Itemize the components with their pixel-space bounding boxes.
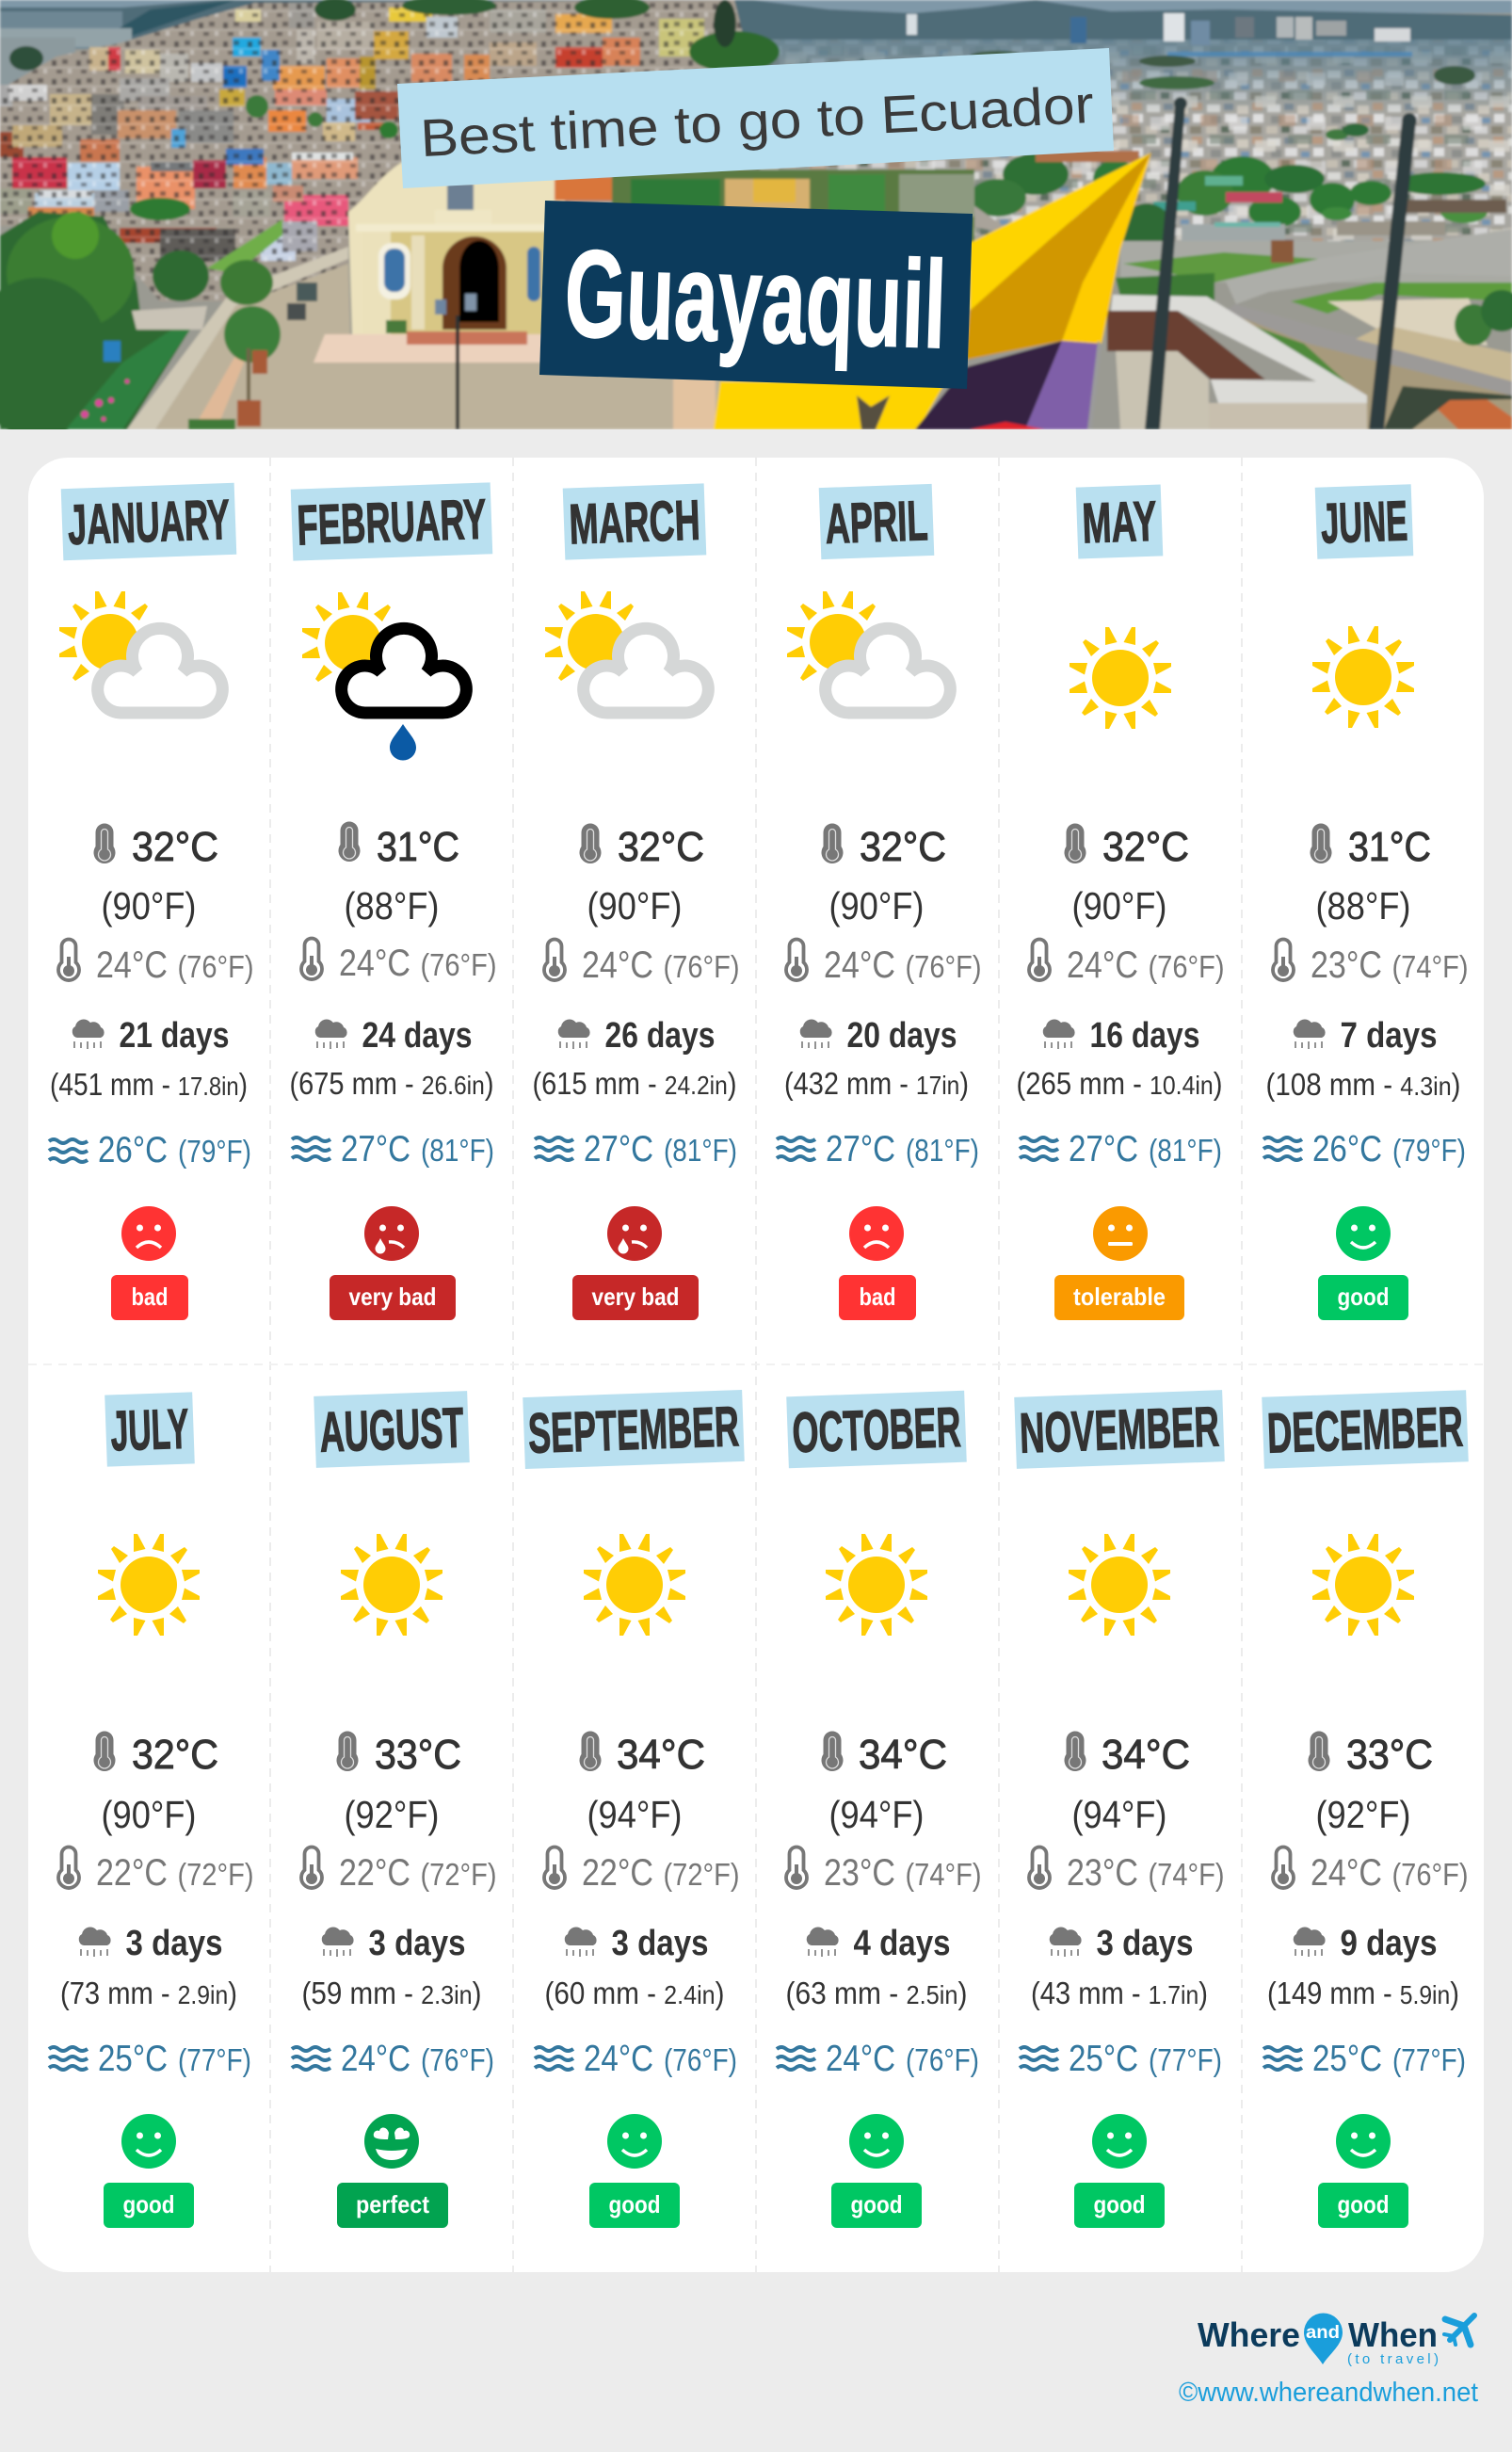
- low temperature: [786, 1847, 981, 1894]
- rainfall: (73 mm - 2.9in): [60, 1976, 237, 2010]
- rating pill: good: [1318, 1275, 1408, 1320]
- month label: AUGUST: [318, 1395, 465, 1464]
- rainy days: 20 days: [847, 1016, 957, 1056]
- rainfall: (60 mm - 2.4in): [545, 1976, 725, 2010]
- rating face: good: [121, 2114, 176, 2169]
- terrace wall and plaza: [127, 247, 734, 429]
- sea temperature: [535, 2039, 737, 2079]
- rating face: good: [1092, 2114, 1147, 2169]
- month label: SEPTEMBER: [527, 1395, 740, 1465]
- sea temperature: 26°C: [1312, 1129, 1382, 1170]
- sea temperature: [1020, 2039, 1222, 2079]
- high temperature: 34°C: [1102, 1732, 1190, 1778]
- sea temperature: (77°F): [1149, 2042, 1222, 2077]
- low temperature: [786, 940, 981, 986]
- low temperature: (76°F): [663, 949, 740, 984]
- trees and garden left: [0, 212, 207, 438]
- weather icon: sun: [341, 1534, 442, 1636]
- low temperature: 23°C: [824, 1852, 895, 1894]
- rating face: good: [1336, 2114, 1391, 2169]
- rating pill: perfect: [337, 2183, 448, 2228]
- month: May: [1017, 484, 1224, 1320]
- rainy days: 3 days: [369, 1924, 465, 1963]
- rainfall: (63 mm - 2.5in): [785, 1976, 968, 2010]
- rating pill: perfect: perfect: [356, 2190, 429, 2218]
- rainy days: [1043, 1016, 1199, 1056]
- low temperature: [1029, 940, 1224, 986]
- green behind title: [555, 169, 974, 429]
- low temperature: 22°C: [339, 1852, 410, 1894]
- month label: [314, 1391, 470, 1468]
- low temperature: 24°C: [1311, 1852, 1382, 1894]
- sea temperature: 26°C: [98, 1130, 168, 1170]
- rating pill: bad: [111, 1275, 188, 1320]
- low temperature: (74°F): [1391, 949, 1469, 984]
- rainy days: 3 days: [126, 1924, 222, 1963]
- month: March: [533, 483, 740, 1320]
- high temperature: [339, 821, 459, 870]
- sea temperature: 27°C: [1069, 1129, 1138, 1170]
- L-shaped building: [1107, 295, 1367, 429]
- month: July: [49, 1392, 254, 2228]
- title banner: Best time to go to Ecuador: Best time to go to Ecuador: [419, 74, 1095, 168]
- rainy days: [1294, 1924, 1437, 1963]
- sea temperature: 25°C: [98, 2039, 168, 2079]
- icon: map pin with and: and: [1306, 2323, 1340, 2343]
- weather icon: sun: [1070, 627, 1171, 729]
- sea temperature: 25°C: [1069, 2039, 1138, 2079]
- weather icon: sun and grey cloud: [59, 591, 222, 713]
- rating pill: good: good: [1337, 1282, 1390, 1311]
- sea temperature: [292, 2039, 494, 2079]
- high temperature: [821, 1731, 947, 1778]
- weather icon: sun, black cloud and rain drop: [302, 592, 466, 761]
- sea temperature: [292, 1129, 494, 1170]
- rating pill: bad: bad: [859, 1282, 896, 1311]
- sea temperature: 27°C: [341, 1129, 410, 1170]
- high temperature in Fahrenheit: (90°F): [828, 884, 925, 928]
- sea temperature: [49, 2039, 251, 2079]
- low temperature: (72°F): [663, 1857, 740, 1892]
- high temperature: 32°C: [132, 1732, 218, 1778]
- high temperature: 32°C: [132, 824, 218, 870]
- high temperature: 32°C: [618, 824, 704, 870]
- weather icon: sun and grey cloud: [545, 591, 708, 713]
- rainy days: [1294, 1016, 1437, 1056]
- low temperature: (74°F): [1149, 1857, 1224, 1892]
- rating pill: very bad: very bad: [348, 1282, 437, 1311]
- rating face: bad: [849, 1206, 904, 1261]
- month label: [291, 482, 492, 561]
- rainy days: [315, 1016, 473, 1056]
- month label: [61, 483, 236, 560]
- weather icon: sun: [826, 1534, 927, 1636]
- high temperature in Fahrenheit: (94°F): [1071, 1793, 1167, 1836]
- low temperature: (76°F): [1149, 949, 1224, 984]
- rainfall: (451 mm - 17.8in): [50, 1067, 248, 1102]
- month: August: [292, 1391, 497, 2228]
- sea temperature: [777, 1129, 979, 1170]
- rating pill: good: good: [608, 2190, 661, 2218]
- weather icon: sun: [1069, 1534, 1170, 1636]
- sea temperature: (77°F): [1392, 2042, 1466, 2077]
- low temperature: [544, 940, 740, 986]
- high temperature: [337, 1731, 461, 1778]
- low temperature: 24°C: [824, 944, 895, 986]
- high temperature: 32°C: [860, 824, 946, 870]
- month: December: [1262, 1390, 1469, 2228]
- month: November: [1014, 1390, 1225, 2228]
- high temperature: 33°C: [375, 1732, 461, 1778]
- month label: [1014, 1390, 1225, 1469]
- high temperature: [1064, 823, 1189, 870]
- month: October: [777, 1391, 981, 2228]
- low temperature: 24°C: [1067, 944, 1138, 986]
- month label: JULY: [109, 1397, 190, 1462]
- rainy days: 3 days: [612, 1924, 708, 1963]
- month label: [786, 1391, 967, 1468]
- high temperature: 34°C: [859, 1732, 947, 1778]
- high temperature: [1309, 1731, 1433, 1778]
- rating face: good: [849, 2114, 904, 2169]
- icon: map pin with and: [1304, 2313, 1343, 2364]
- rainy days: 21 days: [119, 1016, 230, 1056]
- rainfall: (432 mm - 17in): [784, 1066, 969, 1101]
- rainy days: [72, 1016, 230, 1056]
- rating pill: very bad: [572, 1275, 699, 1320]
- footer logo: Where and When to travel: [1198, 2313, 1474, 2367]
- high temperature in Fahrenheit: (90°F): [102, 884, 196, 928]
- high temperature: [821, 823, 946, 870]
- roads and fields right: [1116, 229, 1512, 429]
- rating face: perfect: [364, 2114, 419, 2169]
- weather icon: sun and grey cloud: [787, 591, 950, 713]
- low temperature: 24°C: [96, 944, 168, 986]
- rating pill: good: good: [122, 2190, 175, 2218]
- rating pill: very bad: very bad: [591, 1282, 680, 1311]
- sea temperature: (81°F): [906, 1133, 979, 1168]
- month label: [563, 483, 706, 560]
- high temperature: [580, 823, 704, 870]
- rating pill: good: [1318, 2183, 1408, 2228]
- rainy days: [807, 1924, 951, 1963]
- rainfall: (43 mm - 1.7in): [1031, 1976, 1208, 2010]
- sea temperature: 27°C: [826, 1129, 895, 1170]
- low temperature: [58, 940, 254, 986]
- rating pill: good: good: [1337, 2190, 1390, 2218]
- sea temperature: 25°C: [1312, 2039, 1382, 2079]
- weather icon: sun: [98, 1534, 200, 1636]
- church: [314, 162, 568, 429]
- rating pill: good: good: [851, 2190, 902, 2218]
- rating pill: good: [1074, 2183, 1165, 2228]
- rainy days: [79, 1924, 222, 1963]
- rating pill: tolerable: tolerable: [1073, 1282, 1166, 1311]
- hero photo: Guayaquil city view: [0, 0, 1512, 438]
- high temperature: 34°C: [617, 1732, 705, 1778]
- month: April: [777, 484, 981, 1320]
- rainy days: 24 days: [362, 1016, 473, 1056]
- footer logo: Where and When to travel: (to travel): [1347, 2351, 1439, 2367]
- sea temperature: (81°F): [664, 1133, 737, 1168]
- month label: JANUARY: [67, 488, 231, 557]
- high temperature in Fahrenheit: (90°F): [587, 884, 682, 928]
- sea temperature: (76°F): [664, 2042, 737, 2077]
- high temperature in Fahrenheit: (90°F): [1071, 884, 1167, 928]
- green tree belt mid-right: [973, 149, 1508, 243]
- rainfall: (675 mm - 26.6in): [290, 1066, 493, 1101]
- rating face: very bad: [607, 1206, 662, 1261]
- rainfall: (265 mm - 10.4in): [1017, 1066, 1222, 1101]
- rating pill: good: [831, 2183, 922, 2228]
- high temperature: 31°C: [1348, 824, 1431, 870]
- sea temperature: [1020, 1129, 1222, 1170]
- high temperature in Fahrenheit: (88°F): [345, 884, 439, 928]
- low temperature: [58, 1847, 254, 1894]
- rating pill: bad: [839, 1275, 916, 1320]
- rainy days: 4 days: [853, 1924, 951, 1963]
- sea temperature: (76°F): [906, 2042, 979, 2077]
- high temperature: 31°C: [377, 824, 459, 870]
- low temperature: (76°F): [906, 949, 981, 984]
- city banner: Guayaquil: Guayaquil: [563, 224, 948, 374]
- rating pill: good: [104, 2183, 194, 2228]
- rainy days: [322, 1924, 465, 1963]
- low temperature: 24°C: [582, 944, 653, 986]
- low temperature: 23°C: [1311, 944, 1382, 986]
- sea temperature: 24°C: [341, 2039, 410, 2079]
- rainy days: [558, 1016, 716, 1056]
- rating pill: bad: bad: [132, 1282, 168, 1311]
- low temperature: [1273, 1847, 1469, 1894]
- rating face: good: [1336, 1206, 1391, 1261]
- rainy days: 7 days: [1341, 1016, 1437, 1056]
- sea temperature: 27°C: [584, 1129, 653, 1170]
- high temperature in Fahrenheit: (94°F): [587, 1793, 682, 1836]
- low temperature: 22°C: [96, 1852, 168, 1894]
- weather icon: sun: [584, 1534, 685, 1636]
- sea temperature: (81°F): [1149, 1133, 1222, 1168]
- sea temperature: 24°C: [826, 2039, 895, 2079]
- month label: NOVEMBER: [1019, 1395, 1220, 1465]
- rainfall: (59 mm - 2.3in): [302, 1976, 482, 2010]
- rainy days: 3 days: [1096, 1924, 1194, 1963]
- rainfall: (108 mm - 4.3in): [1265, 1067, 1461, 1102]
- sea temperature: 24°C: [584, 2039, 653, 2079]
- high temperature: [580, 1731, 705, 1778]
- month label: MARCH: [568, 489, 701, 556]
- month label: APRIL: [824, 489, 929, 556]
- title banner: Best time to go to Ecuador: [397, 48, 1114, 188]
- sea temperature: [1263, 1129, 1466, 1170]
- sea temperature: (81°F): [421, 1133, 494, 1168]
- high temperature: [1311, 823, 1431, 870]
- high temperature: [94, 823, 218, 870]
- city banner: Guayaquil: [539, 201, 973, 389]
- white calendar panel: [28, 458, 1484, 2272]
- sea temperature: [777, 2039, 979, 2079]
- low temperature: [1273, 940, 1469, 986]
- low temperature: (76°F): [177, 949, 254, 984]
- low temperature: (74°F): [906, 1857, 981, 1892]
- high temperature: [1064, 1731, 1190, 1778]
- month label: JUNE: [1320, 489, 1408, 556]
- low temperature: (72°F): [420, 1857, 497, 1892]
- rainfall: (149 mm - 5.9in): [1267, 1976, 1459, 2010]
- sea temperature: (76°F): [421, 2042, 494, 2077]
- month: June: [1263, 484, 1469, 1320]
- high temperature in Fahrenheit: (90°F): [102, 1793, 196, 1836]
- sea temperature: (79°F): [1392, 1133, 1466, 1168]
- hillside with colourful houses: [0, 0, 780, 308]
- month label: [1315, 484, 1413, 559]
- rainy days: 9 days: [1341, 1924, 1437, 1963]
- low temperature: (72°F): [177, 1857, 254, 1892]
- month label: [819, 484, 934, 559]
- low temperature: 22°C: [582, 1852, 653, 1894]
- flag poles: [1145, 97, 1417, 429]
- low temperature: (76°F): [420, 947, 497, 982]
- month: February: [290, 482, 497, 1320]
- low temperature: 24°C: [339, 943, 410, 984]
- Ecuador flag: [714, 153, 1151, 429]
- high temperature in Fahrenheit: (94°F): [828, 1793, 925, 1836]
- rainy days: [565, 1924, 708, 1963]
- rating face: bad: [121, 1206, 176, 1261]
- rating face: good: [607, 2114, 662, 2169]
- month label: [105, 1392, 195, 1467]
- low temperature: [544, 1847, 740, 1894]
- low temperature: (76°F): [1391, 1857, 1469, 1892]
- month label: [1076, 484, 1163, 559]
- sea temperature: [1263, 2039, 1466, 2079]
- footer logo: Where and When to travel: When: [1348, 2315, 1438, 2354]
- high temperature: 33°C: [1346, 1732, 1433, 1778]
- month: January: [49, 483, 254, 1320]
- low temperature: [301, 938, 497, 984]
- rainy days: 26 days: [604, 1016, 716, 1056]
- weather icon: sun: [1312, 1534, 1414, 1636]
- rating face: very bad: [364, 1206, 419, 1261]
- low temperature: 23°C: [1067, 1852, 1138, 1894]
- footer logo: Where and When to travel: Where: [1198, 2315, 1300, 2354]
- low temperature: [301, 1847, 497, 1894]
- icon: airplane: [1444, 2315, 1474, 2345]
- sea temperature: (77°F): [178, 2042, 251, 2077]
- website credit: ©www.whereandwhen.net: [1179, 2378, 1478, 2408]
- rating face: tolerable: [1093, 1206, 1148, 1261]
- rainfall: (615 mm - 24.2in): [533, 1066, 736, 1101]
- rating pill: good: [589, 2183, 680, 2228]
- high temperature: [94, 1731, 218, 1778]
- month: September: [523, 1390, 745, 2228]
- rainy days: [800, 1016, 957, 1056]
- sea temperature: (79°F): [178, 1134, 251, 1169]
- sea temperature: [49, 1130, 251, 1170]
- low temperature: [1029, 1847, 1224, 1894]
- month label: FEBRUARY: [296, 488, 488, 557]
- high temperature in Fahrenheit: (92°F): [1316, 1793, 1410, 1836]
- weather icon: sun: [1312, 626, 1414, 728]
- rating pill: very bad: [330, 1275, 456, 1320]
- rainy days: [1050, 1924, 1194, 1963]
- sea temperature: [535, 1129, 737, 1170]
- rating pill: good: good: [1094, 2190, 1145, 2218]
- rainy days: 16 days: [1090, 1016, 1199, 1056]
- rating pill: tolerable: [1054, 1275, 1184, 1320]
- month label: OCTOBER: [791, 1395, 962, 1464]
- high temperature in Fahrenheit: (88°F): [1316, 884, 1410, 928]
- month label: MAY: [1081, 490, 1158, 555]
- high temperature in Fahrenheit: (92°F): [345, 1793, 439, 1836]
- month label: [523, 1390, 745, 1469]
- high temperature: 32°C: [1102, 824, 1189, 870]
